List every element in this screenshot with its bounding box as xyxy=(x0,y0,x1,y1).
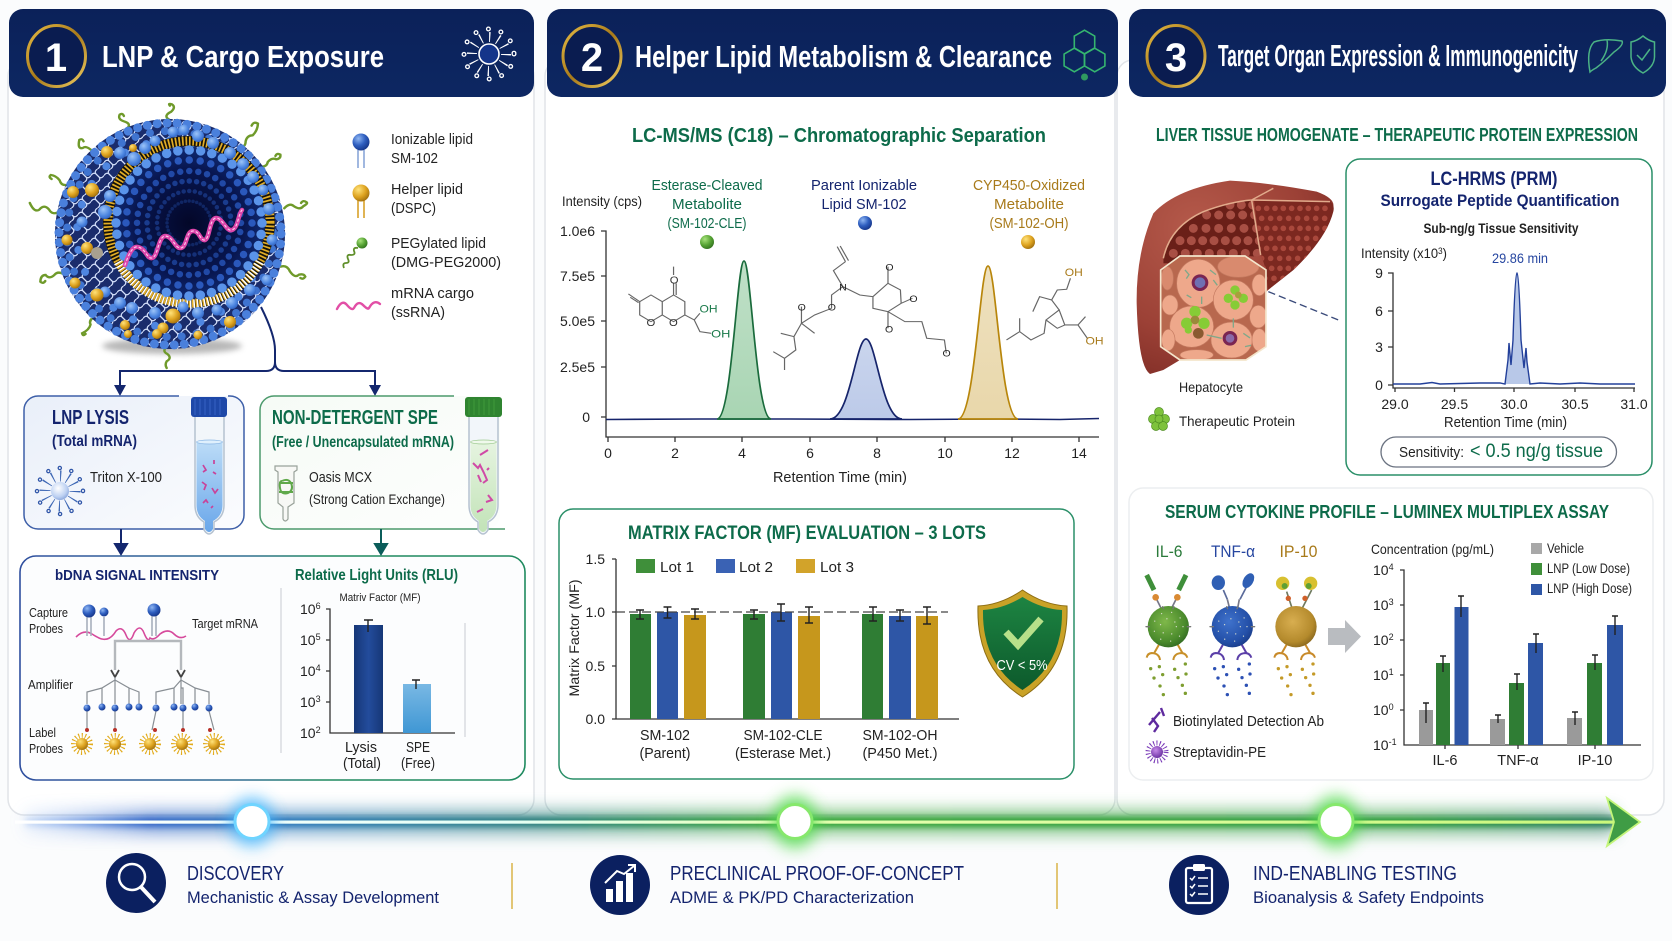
label: parent ionizable lipid: Lipid SM-102 xyxy=(822,196,906,213)
label: esterase-cleaved metabolite xyxy=(652,177,762,249)
molecule: parent lipid: O xyxy=(909,294,918,305)
heading: LC-HRMS: Sub-ng/g Tissue Sensitivity xyxy=(1424,221,1579,236)
cytokine bar chart: 2 xyxy=(1389,632,1394,642)
y axis title: Intensity (cps) xyxy=(562,193,642,209)
panel: LC-HRMS PRM xyxy=(1346,159,1652,475)
molecule: oxidized metabolite xyxy=(1006,268,1104,347)
cytokine bar chart: 10 xyxy=(1373,562,1389,578)
heading: NON-DETERGENT SPE: NON-DETERGENT SPE xyxy=(272,407,438,429)
heading: NON-DETERGENT SPE: (Free / Unencapsulated mRNA) xyxy=(272,434,454,451)
assay legend: Biotinylated Detection Ab xyxy=(1173,714,1324,730)
x axis labels: SM-102 xyxy=(640,728,690,744)
molecule: esterase metabolite xyxy=(628,267,730,340)
Triton label: Triton X-100 xyxy=(90,469,162,486)
step number 3 xyxy=(1147,26,1205,86)
label: parent ionizable lipid xyxy=(811,177,917,230)
LNP particle illustration xyxy=(30,104,307,368)
step number 3: 3 xyxy=(1165,36,1187,80)
RLU bar chart: 10 xyxy=(300,601,316,617)
labels xyxy=(28,606,259,756)
y axis labels: 2.5e5 xyxy=(560,359,595,375)
label probe suns xyxy=(74,728,222,752)
Oasis label: Oasis MCX xyxy=(309,469,372,486)
PRM chromatogram: 29.86 min xyxy=(1492,250,1548,266)
label: esterase-cleaved metabolite: Esterase-Cleaved xyxy=(652,177,762,194)
x axis labels xyxy=(640,728,938,762)
heading: LNP LYSIS: (Total mRNA) xyxy=(52,433,137,450)
x axis labels: 14 xyxy=(1071,445,1087,461)
target mRNA and capture probes xyxy=(76,604,186,640)
helper lipid xyxy=(352,181,463,218)
ionizable lipid: Ionizable lipid xyxy=(391,131,473,148)
Oasis label: (Strong Cation Exchange) xyxy=(309,491,445,507)
heading: bDNA SIGNAL INTENSITY: bDNA SIGNAL INTENSITY xyxy=(55,567,219,584)
cut surface: cobbled section xyxy=(1163,200,1260,264)
cytokine bar chart xyxy=(1371,541,1641,769)
legend: lots: Lot 1 xyxy=(660,559,694,576)
panel: helper lipid metabolism background xyxy=(545,60,1115,815)
stage text xyxy=(670,863,964,907)
mRNA cargo: mRNA cargo xyxy=(391,285,474,302)
label: CYP450-oxidized metabolite: CYP450-Oxidized xyxy=(973,177,1085,194)
cytokine labels: IP-10 xyxy=(1280,542,1318,561)
PRM chromatogram: 9 xyxy=(1375,265,1383,281)
PRM chromatogram: Retention Time (min) xyxy=(1444,415,1567,431)
molecule: parent lipid: O xyxy=(943,349,951,359)
molecule: parent lipid: O xyxy=(885,325,893,335)
ionizable lipid xyxy=(352,131,473,168)
cytokine bar chart: IP-10 xyxy=(1578,753,1612,769)
timeline arrow with stage nodes xyxy=(15,796,1640,848)
panel: bDNA signal and RLU chart xyxy=(20,556,525,780)
x axis title: Retention Time (min) xyxy=(773,469,907,486)
PRM chromatogram: Intensity (x10 xyxy=(1361,245,1444,261)
molecule: parent lipid: O xyxy=(828,303,836,313)
cytokine bar chart: IL-6 xyxy=(1432,753,1458,769)
node: preclinical xyxy=(773,796,817,848)
icon: nanoparticle xyxy=(464,29,514,79)
PRM chromatogram: 6 xyxy=(1375,303,1383,319)
molecule: esterase metabolite: OH xyxy=(711,327,730,340)
assay legend xyxy=(1148,708,1324,761)
molecule: parent lipid: O xyxy=(798,303,806,313)
panel: LNP and cargo exposure background xyxy=(8,60,534,815)
RLU bar chart: Lysis xyxy=(345,740,377,756)
footer: discovery xyxy=(106,853,439,913)
cut surface: meshed section xyxy=(1254,201,1334,290)
icon: magnifier xyxy=(106,853,166,913)
molecule: esterase metabolite: O xyxy=(646,318,655,329)
PRM chromatogram: 30.0 xyxy=(1500,396,1528,412)
y axis labels: 5.0e5 xyxy=(560,313,595,329)
x axis labels: 6 xyxy=(806,445,814,461)
icon: clipboard xyxy=(1169,855,1229,915)
step number 1 xyxy=(28,26,86,86)
chart legend xyxy=(1531,541,1632,596)
icon: rising bars xyxy=(590,855,650,915)
bDNA diagram xyxy=(28,604,259,756)
heading: LC-HRMS xyxy=(1380,169,1620,236)
x axis labels xyxy=(604,445,1087,461)
node: discovery xyxy=(230,798,274,846)
footer: preclinical xyxy=(590,855,964,915)
cytokine bar chart: 10 xyxy=(1373,702,1389,718)
axes xyxy=(601,231,1099,442)
panel: non-detergent SPE xyxy=(260,396,505,534)
arrow head xyxy=(1607,798,1640,846)
panel: matrix factor evaluation xyxy=(559,509,1074,779)
heading: serum cytokine: SERUM CYTOKINE PROFILE – LUMINEX MULTIPLEX ASSAY xyxy=(1165,502,1609,522)
cytokine bar chart: 10 xyxy=(1373,632,1389,648)
beads with antibodies xyxy=(1146,571,1317,695)
chart legend: LNP (High Dose) xyxy=(1547,581,1632,596)
labels: Label xyxy=(29,726,56,740)
x axis labels: 8 xyxy=(873,445,881,461)
stage text: PRECLINICAL PROOF-OF-CONCEPT xyxy=(670,863,964,885)
y axis labels: 0.5 xyxy=(586,658,605,674)
stage text: DISCOVERY xyxy=(187,863,284,885)
callout: sensitivity: Sensitivity: xyxy=(1399,445,1464,461)
molecule: esterase metabolite: O xyxy=(670,275,679,286)
header 2 xyxy=(547,9,1118,97)
legend: lots xyxy=(636,559,854,576)
x axis labels: (Parent) xyxy=(640,746,690,762)
RLU bar chart: SPE xyxy=(406,740,430,756)
liver legend: Hepatocyte xyxy=(1179,379,1243,395)
gray connector xyxy=(115,641,181,670)
mRNA cargo xyxy=(337,285,474,321)
RLU bar chart: Matriv Factor (MF) xyxy=(340,592,420,604)
y axis labels: 1.5 xyxy=(586,551,605,567)
cytokine labels: TNF-α xyxy=(1211,542,1255,561)
peak: green metabolite xyxy=(717,261,771,419)
labels: Probes xyxy=(29,742,63,756)
heading: LC-MS/MS chromatographic separation: LC-MS/MS (C18) – Chromatographic Separation xyxy=(632,125,1046,147)
labels: Amplifier xyxy=(28,678,73,692)
PRM chromatogram: 31.0 xyxy=(1620,396,1648,412)
y axis title: Matrix Factor (MF) xyxy=(566,580,582,696)
PRM chromatogram: 29.0 xyxy=(1381,396,1409,412)
PEG chains on the surface xyxy=(30,104,307,368)
stage text xyxy=(187,863,439,907)
x axis labels: 2 xyxy=(671,445,679,461)
baseline xyxy=(606,418,1099,420)
callout: sensitivity: < 0.5 ng/g tissue xyxy=(1470,441,1603,462)
PRM chromatogram: 29.5 xyxy=(1441,396,1468,412)
chart legend: Vehicle xyxy=(1547,541,1584,556)
arrow: lysis to bDNA xyxy=(115,529,127,554)
heading: LC-HRMS: Surrogate Peptide Quantification xyxy=(1380,191,1620,210)
bead: TNF-alpha xyxy=(1210,571,1257,695)
RLU bar chart: 3 xyxy=(316,694,321,704)
arrow: LNP splits to lysis and SPE xyxy=(114,307,381,396)
stage text: ADME & PK/PD Characterization xyxy=(670,888,914,907)
y axis labels: 0 xyxy=(582,409,590,425)
icon: green sample tube xyxy=(465,397,502,534)
magnified hepatocytes xyxy=(1161,256,1267,360)
icon: liver outline xyxy=(1589,40,1622,72)
cytokine bar chart: 10 xyxy=(1373,667,1389,683)
label: CYP450-oxidized metabolite: (SM-102-OH) xyxy=(990,215,1068,232)
bars xyxy=(616,604,948,719)
header 3 xyxy=(1129,9,1666,97)
labels: Target mRNA xyxy=(192,617,259,631)
cytokine labels xyxy=(1156,542,1318,561)
header 1 xyxy=(9,9,534,97)
icon: blue sample tube xyxy=(191,397,227,534)
molecule: oxidized metabolite: OH xyxy=(1085,336,1104,347)
molecule: parent lipid: O xyxy=(885,263,894,273)
badge: CV under 5%: CV < 5% xyxy=(996,657,1048,674)
liver illustration xyxy=(1137,181,1338,430)
cytokine bar chart: 3 xyxy=(1389,597,1394,607)
helper lipid: Helper lipid xyxy=(391,181,463,198)
labels: Capture xyxy=(29,606,68,620)
molecule: esterase metabolite: OH xyxy=(700,304,718,315)
heading: LNP LYSIS: LNP LYSIS xyxy=(52,407,129,429)
x axis labels: 12 xyxy=(1004,445,1020,461)
RLU bar chart: 4 xyxy=(316,663,321,673)
PRM chromatogram: ) xyxy=(1443,245,1447,261)
molecule: oxidized metabolite: OH xyxy=(1065,268,1083,279)
axes xyxy=(612,559,959,719)
bead: IP-10 xyxy=(1274,577,1317,695)
panel: target organ expression background xyxy=(1117,60,1664,815)
labels: Probes xyxy=(29,622,63,636)
cytokine bar chart: 4 xyxy=(1389,562,1394,572)
PEGylated lipid: PEGylated lipid xyxy=(391,235,486,252)
step number 2: 2 xyxy=(581,36,603,80)
x axis labels: 4 xyxy=(738,445,746,461)
heading: matrix factor: MATRIX FACTOR (MF) EVALUATION – 3 LOTS xyxy=(628,523,986,544)
panel: LNP lysis xyxy=(24,396,244,534)
RLU bar chart: 10 xyxy=(300,694,316,710)
panel: serum cytokine profile xyxy=(1129,488,1653,780)
Oasis label xyxy=(309,469,445,507)
cytokine bar chart: 0 xyxy=(1389,702,1394,712)
stage text xyxy=(1253,863,1484,907)
x axis labels: 0 xyxy=(604,445,612,461)
chromatogram xyxy=(560,177,1104,486)
y axis labels: 1.0 xyxy=(586,604,605,620)
cytokine bar chart: 10 xyxy=(1373,737,1389,753)
heading: Relative Light Units: Relative Light Units (RLU) xyxy=(295,567,458,584)
PRM chromatogram xyxy=(1361,245,1648,431)
heading: NON-DETERGENT SPE xyxy=(272,407,454,451)
stage text: IND-ENABLING TESTING xyxy=(1253,863,1457,885)
label: CYP450-oxidized metabolite xyxy=(973,177,1085,249)
y axis labels xyxy=(560,223,595,425)
cytokine bar chart: 10 xyxy=(1373,597,1389,613)
x axis labels: SM-102-OH xyxy=(862,728,938,744)
legend: lipid components xyxy=(337,131,501,321)
PRM chromatogram: 0 xyxy=(1375,377,1383,393)
peak: parent lipid xyxy=(830,339,902,419)
arrow: SPE to RLU xyxy=(375,529,387,554)
footer: IND-enabling xyxy=(1169,855,1484,915)
PRM chromatogram: 3 xyxy=(1375,339,1383,355)
step number 2 xyxy=(563,26,621,86)
heading: LC-HRMS: LC-HRMS (PRM) xyxy=(1430,169,1558,190)
RLU bar chart: 5 xyxy=(316,632,321,642)
helper lipid: (DSPC) xyxy=(391,200,436,217)
cytokine bar chart: -1 xyxy=(1389,737,1397,747)
cytokine bar chart: TNF-α xyxy=(1497,753,1539,769)
lipid bilayer rim xyxy=(108,141,270,304)
x axis labels: (P450 Met.) xyxy=(862,746,938,762)
molecule: parent lipid xyxy=(773,246,951,370)
y axis labels: 1.0e6 xyxy=(560,223,595,239)
RLU bar chart: (Free) xyxy=(401,756,435,772)
molecule: parent lipid: N xyxy=(839,283,847,293)
dashed callout line xyxy=(1268,292,1338,320)
RLU bar chart xyxy=(300,592,455,772)
PEGylated lipid: (DMG-PEG2000) xyxy=(391,254,501,271)
liver legend xyxy=(1148,379,1295,430)
stage text: Mechanistic & Assay Development xyxy=(187,888,439,907)
cytokine bar chart: Concentration (pg/mL) xyxy=(1371,541,1494,557)
RLU bar chart: (Total) xyxy=(343,756,381,772)
mRNA in core xyxy=(125,210,242,265)
amplifier trees xyxy=(87,670,214,730)
legend: lots: Lot 2 xyxy=(739,559,773,576)
heading: LNP & Cargo Exposure: LNP & Cargo Exposure xyxy=(102,39,384,74)
cytokine bar chart: 1 xyxy=(1389,667,1394,677)
PRM chromatogram: 30.5 xyxy=(1561,396,1589,412)
chart legend: LNP (Low Dose) xyxy=(1547,561,1630,576)
PRM chromatogram: 3 xyxy=(1438,246,1443,256)
mRNA cargo: (ssRNA) xyxy=(391,304,445,321)
RLU bar chart: 2 xyxy=(316,725,321,735)
x axis labels: 10 xyxy=(937,445,953,461)
x axis labels: SM-102-CLE xyxy=(744,728,823,744)
ionizable lipid: SM-102 xyxy=(391,150,438,167)
node: IND-enabling xyxy=(1314,796,1358,848)
y axis labels: 0.0 xyxy=(586,711,605,727)
step number 1: 1 xyxy=(45,36,67,80)
label: esterase-cleaved metabolite: (SM-102-CLE) xyxy=(668,215,747,232)
icon: shield check xyxy=(1631,36,1654,73)
y axis labels xyxy=(586,551,605,727)
peak: oxidized metabolite xyxy=(958,266,1018,419)
lipid heads on shell xyxy=(76,124,278,319)
molecule: esterase metabolite: O xyxy=(669,318,678,329)
icon: hexagon molecule xyxy=(1064,30,1105,80)
cytokine labels: IL-6 xyxy=(1156,542,1182,561)
stage text: Bioanalysis & Safety Endpoints xyxy=(1253,888,1484,907)
liver legend: Therapeutic Protein xyxy=(1179,413,1295,429)
badge: CV under 5% xyxy=(978,590,1067,697)
y axis labels: 7.5e5 xyxy=(560,268,595,284)
RLU bar chart: 6 xyxy=(316,601,321,611)
PEGylated lipid xyxy=(343,235,501,271)
x axis labels: (Esterase Met.) xyxy=(735,746,831,762)
legend: lots: Lot 3 xyxy=(820,559,854,576)
label: esterase-cleaved metabolite: Metabolite xyxy=(672,196,742,213)
callout: sensitivity xyxy=(1381,437,1616,467)
label: parent ionizable lipid: Parent Ionizable xyxy=(811,177,917,194)
heading: Helper Lipid Metabolism & Clearance: Helper Lipid Metabolism & Clearance xyxy=(635,39,1052,74)
RLU bar chart: 10 xyxy=(300,632,316,648)
assay legend: Streptavidin-PE xyxy=(1173,745,1266,761)
RLU bar chart: 10 xyxy=(300,663,316,679)
bead: IL-6 xyxy=(1146,575,1191,695)
RLU bar chart: 10 xyxy=(300,725,316,741)
arrow: gray to chart xyxy=(1328,620,1361,653)
label: CYP450-oxidized metabolite: Metabolite xyxy=(994,196,1064,213)
icon: Oasis MCX cartridge xyxy=(275,466,297,521)
heading: LNP LYSIS xyxy=(52,407,137,450)
icon: Triton micelle xyxy=(37,468,83,514)
